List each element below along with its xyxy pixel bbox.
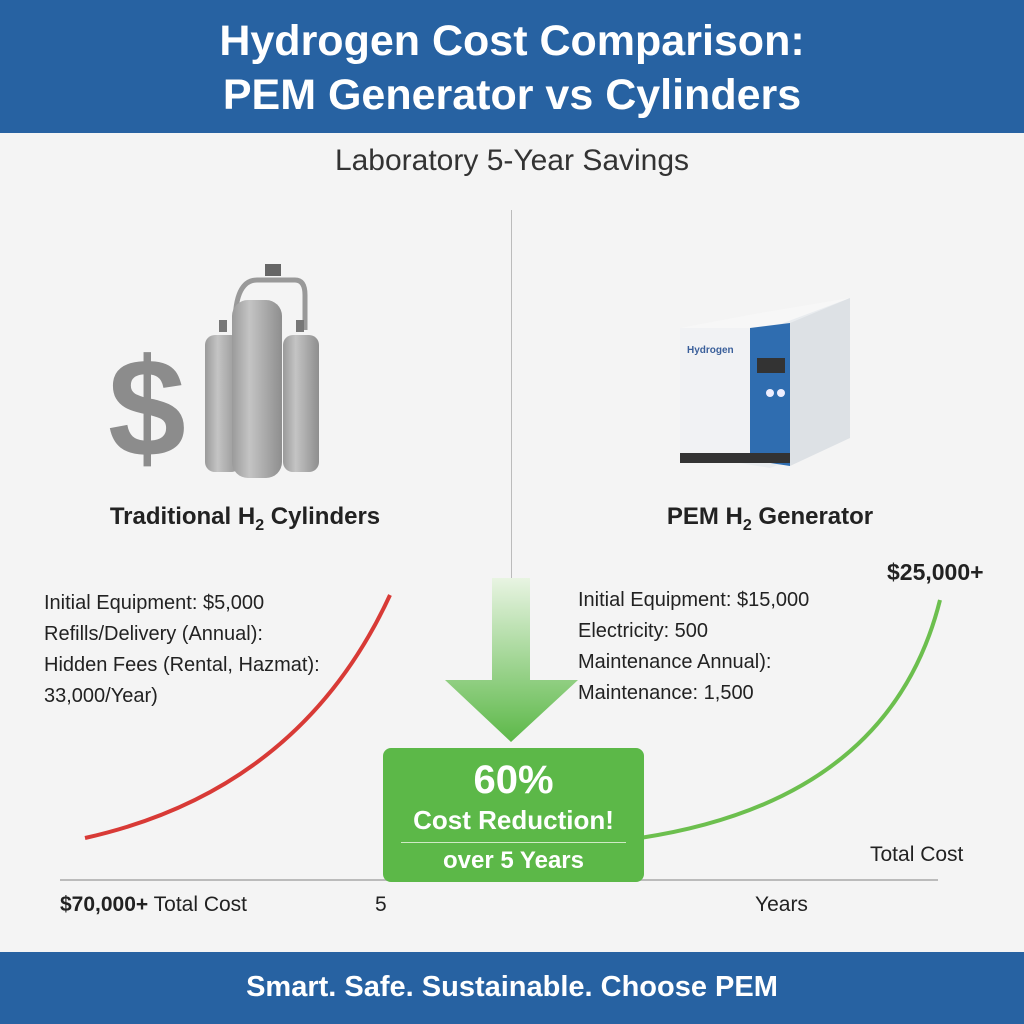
footer [0,952,1024,1024]
text: generator costs: Initial Equipment: $15,000 [578,589,809,611]
label: cylinders: Traditional H2 Cylinders [110,503,380,534]
text: generator costs: Maintenance: 1,500 [578,682,754,704]
label: total cost: Total Cost [870,843,963,866]
callout: 60%: over 5 Years [443,847,584,874]
text: generator costs: Maintenance Annual): [578,651,771,673]
axis labels: 5 [375,893,387,916]
title [219,17,805,119]
axis labels: $70,000+ Total Cost [60,893,247,916]
text: cylinder costs: Hidden Fees (Rental, Hazmat): [44,654,320,676]
text: generator costs [578,589,809,704]
label: $25,000+: $25,000+ [887,559,984,585]
text: cylinder costs: Refills/Delivery (Annual): [44,623,263,645]
callout: 60%: Cost Reduction! [413,805,614,835]
icon: generator [680,298,850,468]
text: cylinder costs: 33,000/Year) [44,685,158,707]
text: cylinder costs [44,592,320,707]
callout: 60%: 60% [473,758,554,802]
icon: dollar sign: $ [108,329,186,486]
label: generator: PEM H2 Generator [667,503,873,534]
title: PEM Generator vs Cylinders [223,71,801,119]
title: Hydrogen Cost Comparison: [219,17,805,65]
callout: 60% [383,748,644,882]
icon: cylinders [205,264,319,478]
header band [0,0,1024,133]
footer: Smart. Safe. Sustainable. Choose PEM [246,971,778,1003]
axis labels: Years [755,893,808,916]
text: generator costs: Electricity: 500 [578,620,708,642]
icon: generator: Hydrogen [687,345,734,356]
axis labels [60,893,808,916]
subtitle: Laboratory 5-Year Savings [335,144,689,177]
arrow: down [445,578,578,742]
text: cylinder costs: Initial Equipment: $5,000 [44,592,264,614]
